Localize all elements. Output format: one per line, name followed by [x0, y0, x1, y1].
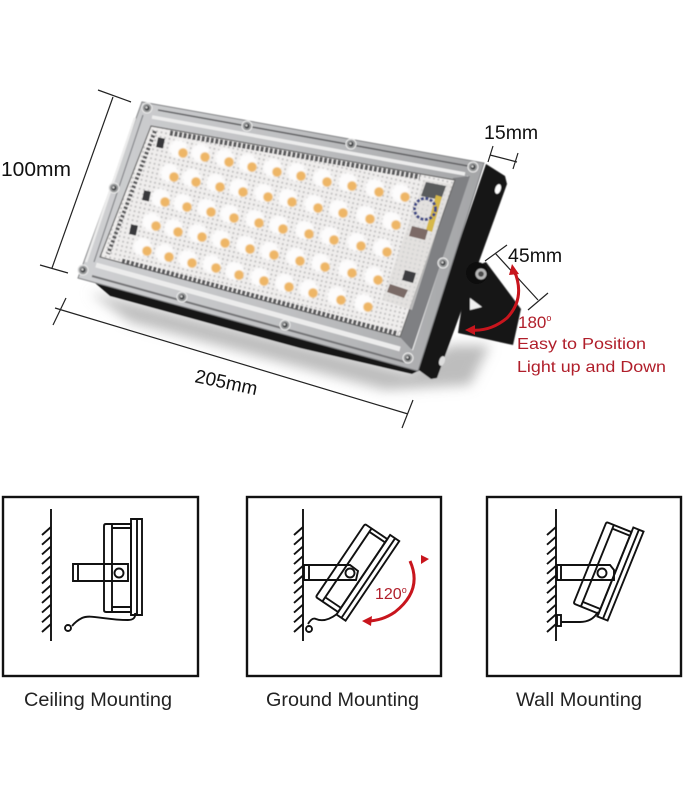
dimension: 45mm: 45mm — [508, 245, 562, 267]
callout: easy to position: o — [546, 313, 551, 323]
panel: ceiling mounting — [3, 497, 198, 711]
frame highlights — [86, 110, 468, 362]
panel: ground mounting — [247, 497, 441, 711]
wall — [547, 509, 556, 641]
caption: Wall Mounting — [516, 690, 642, 711]
dimension: 205mm — [53, 298, 413, 428]
red 120 degree arrow: o — [402, 585, 407, 595]
mounting plate — [416, 164, 507, 379]
dimension: 205mm: 205mm — [193, 366, 259, 400]
product photo: LED flood light — [78, 102, 521, 390]
panel: wall mounting — [487, 497, 681, 711]
panel frame — [487, 497, 681, 676]
caption: Ground Mounting — [266, 690, 419, 711]
callout: easy to position: Light up and Down — [517, 359, 666, 376]
wall — [294, 509, 303, 641]
adjustable arm — [458, 262, 521, 345]
callout: easy to position: Easy to Position — [517, 336, 646, 353]
fixture drawing — [65, 519, 142, 631]
dimension: 100mm: 100mm — [1, 159, 71, 181]
LED grid — [133, 140, 410, 312]
ground shadow — [90, 292, 490, 390]
LED strips along the board edges — [108, 131, 420, 334]
rear housing — [95, 283, 420, 374]
fixture drawing — [304, 520, 399, 632]
dimension: 15mm — [484, 122, 538, 169]
LED board — [100, 126, 455, 337]
red 120 degree arrow: 120 — [375, 586, 402, 603]
dimension: 45mm — [485, 245, 562, 310]
panel frame — [247, 497, 441, 676]
metal frame — [78, 102, 484, 371]
driver components — [129, 137, 452, 310]
red 180 degree rotation arrow — [465, 264, 519, 335]
callout: easy to position — [517, 313, 666, 376]
red 120 degree arrow — [362, 555, 429, 626]
dimension: 100mm — [1, 90, 131, 273]
clear cover right side — [400, 176, 470, 350]
callout: easy to position: 180 — [518, 313, 546, 332]
frame screws — [78, 103, 478, 363]
caption: Ceiling Mounting — [24, 690, 172, 711]
dimension: 15mm: 15mm — [484, 122, 538, 144]
panel frame — [3, 497, 198, 676]
wall — [42, 509, 51, 641]
fixture drawing — [557, 517, 644, 626]
